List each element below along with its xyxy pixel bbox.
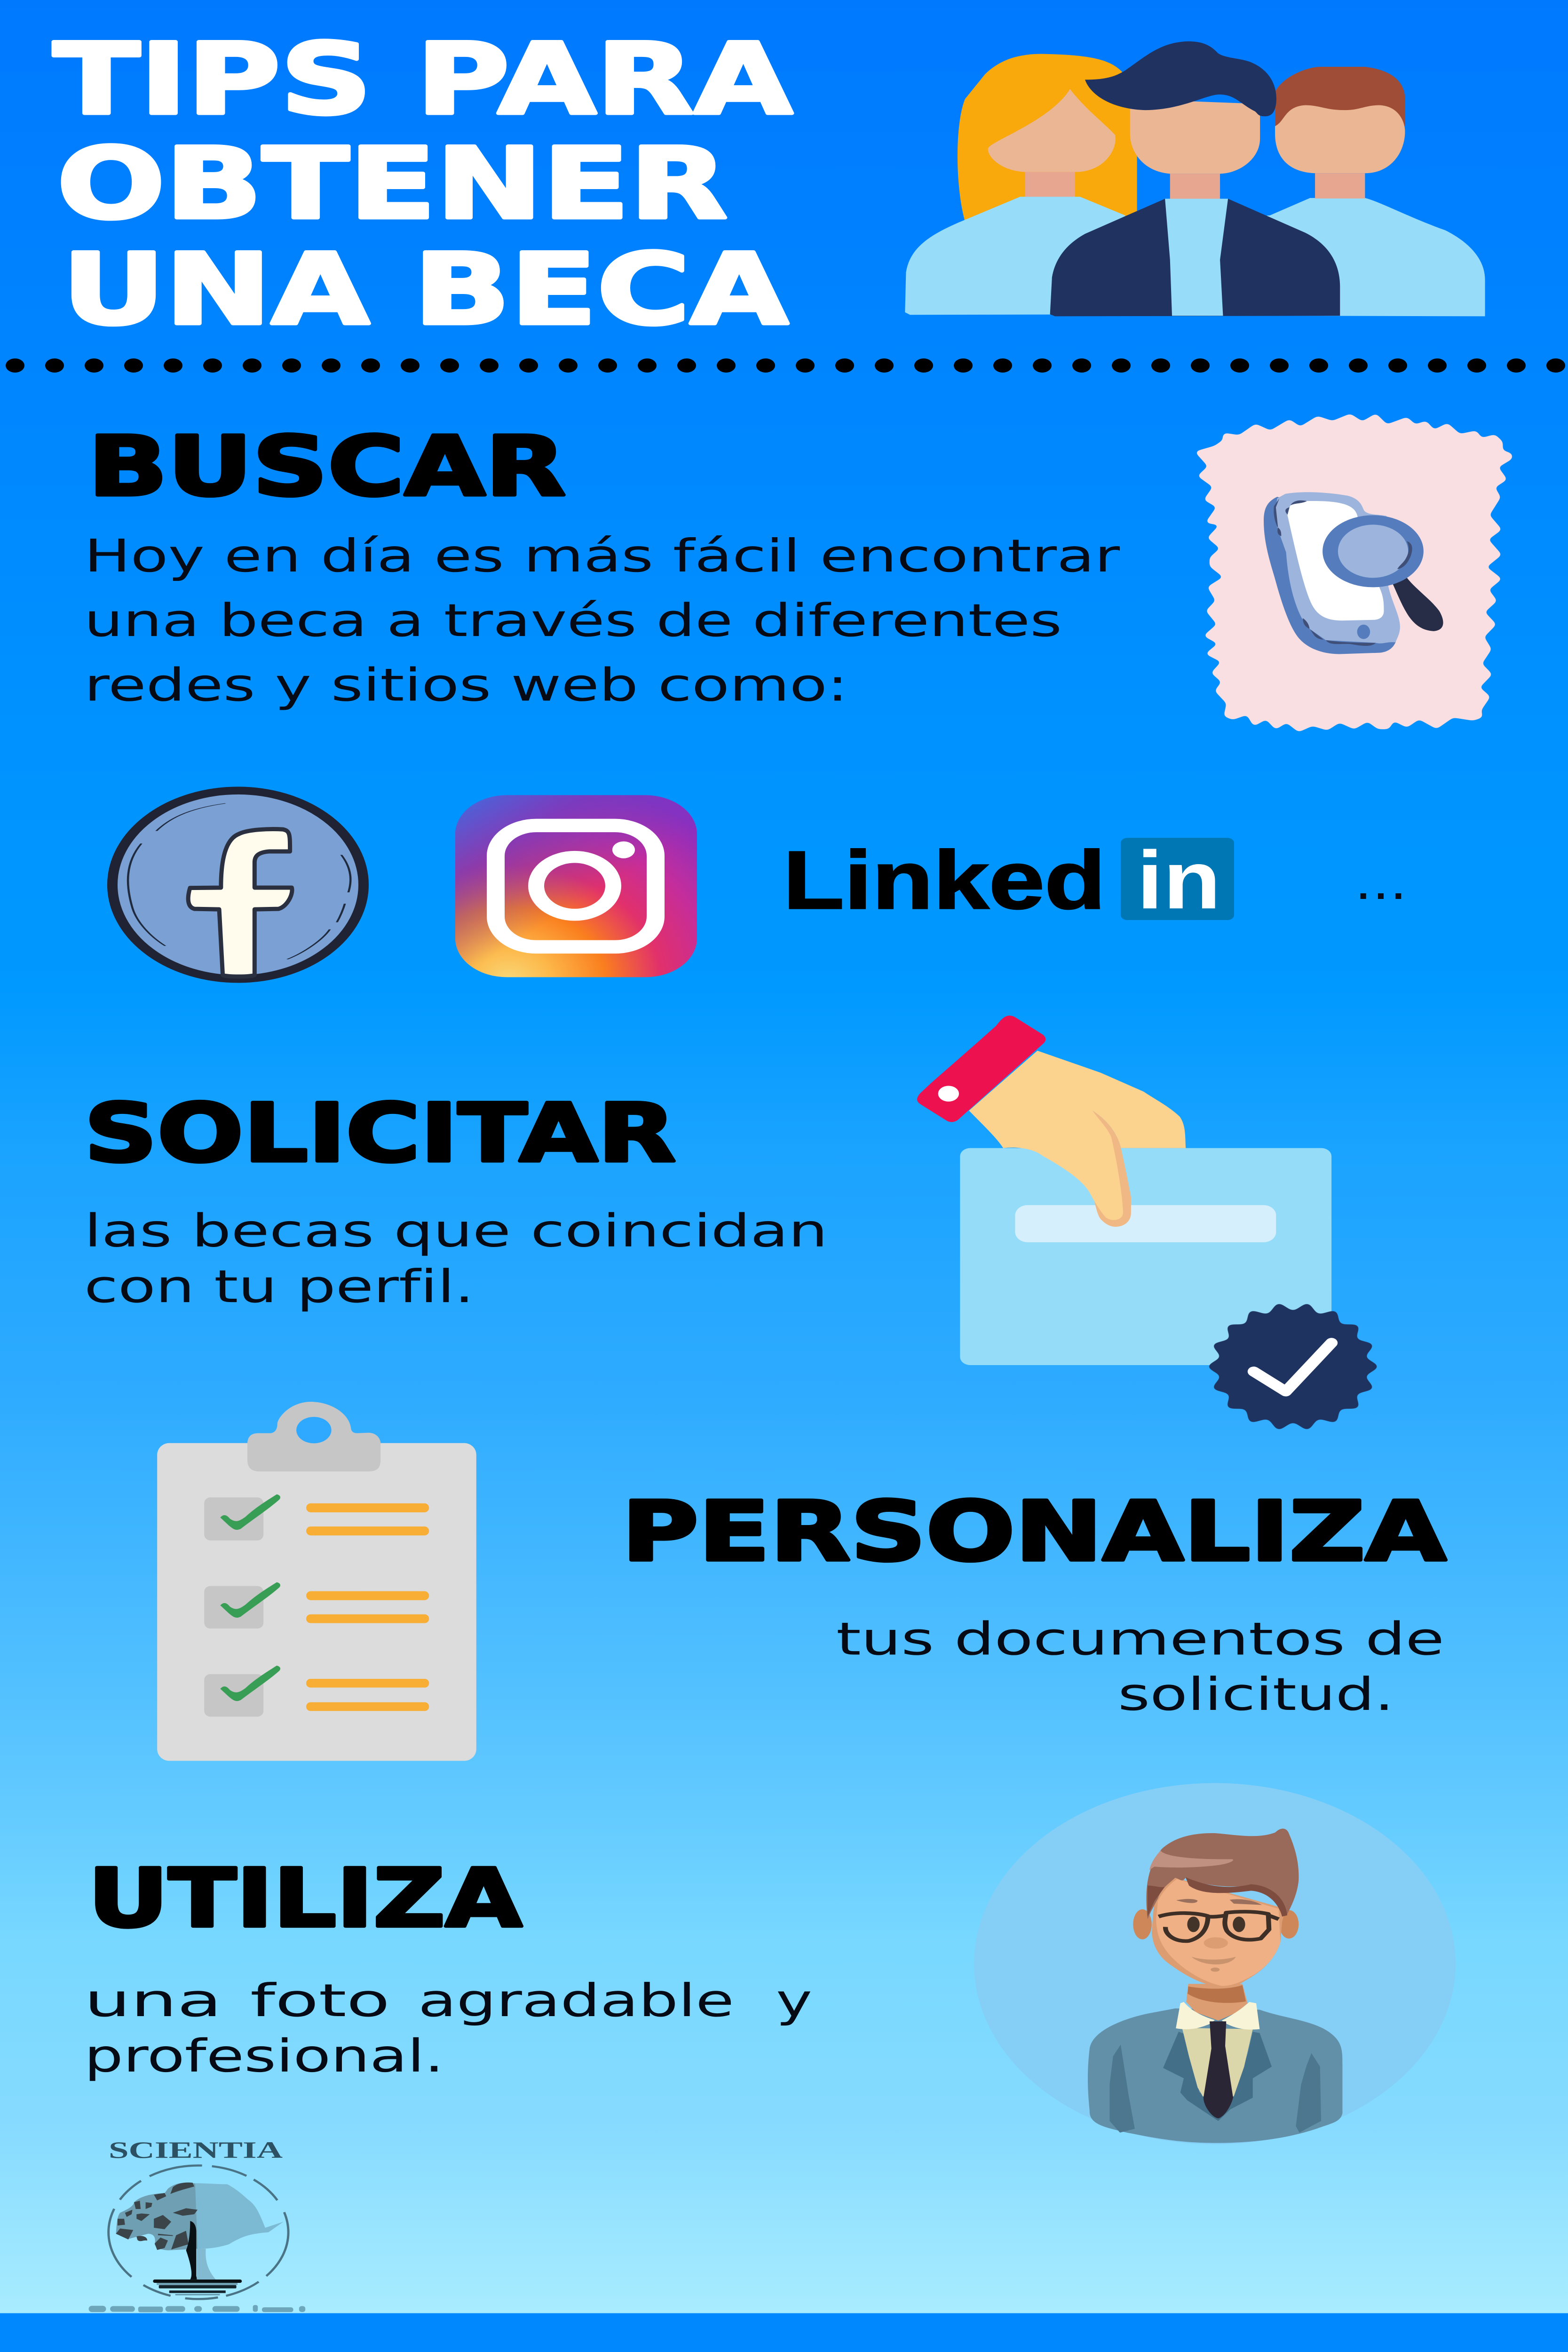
text block: utiliza: agradable	[418, 1974, 734, 2027]
text block: personaliza: tus documentos de	[836, 1613, 1444, 1665]
text block: utiliza	[84, 1974, 812, 2082]
title: TIPS PARA	[53, 22, 792, 136]
text block: buscar: una beca a través de diferentes	[84, 594, 1062, 647]
heading: PERSONALIZA: PERSONALIZA	[622, 1484, 1446, 1580]
text block: utiliza: una	[84, 1974, 222, 2027]
icon: verified badge	[1208, 1303, 1378, 1430]
icon: linkedin: Linked	[783, 834, 1106, 926]
text block: utiliza: foto	[250, 1974, 390, 2027]
ellipsis: ...	[1354, 857, 1407, 910]
logo: scientia tree: SCIENTIA	[109, 2137, 283, 2163]
text block: utiliza: profesional.	[84, 2030, 444, 2082]
icon: three people	[905, 41, 1485, 316]
text block: solicitar	[84, 1205, 828, 1313]
heading: UTILIZA: UTILIZA	[88, 1851, 522, 1946]
footer band	[0, 2313, 1568, 2352]
title: OBTENER	[57, 127, 728, 241]
icon: instagram	[455, 795, 697, 977]
logo: scientia tree	[89, 2137, 305, 2312]
title: UNA BECA	[62, 232, 788, 347]
text block: buscar: Hoy en día es más fácil encontrar	[84, 530, 1120, 582]
title	[53, 22, 792, 347]
text block: utiliza: y	[776, 1974, 812, 2027]
text block: personaliza	[836, 1613, 1444, 1721]
heading: SOLICITAR: SOLICITAR	[84, 1086, 676, 1180]
icon: hand and ballot box	[917, 1016, 1378, 1430]
text block: solicitar: las becas que coincidan	[84, 1205, 828, 1257]
icon: clipboard checklist	[157, 1402, 476, 1761]
icon: phone with magnifier on pink stamp	[1197, 415, 1511, 731]
text block: buscar	[84, 530, 1120, 711]
icon: facebook	[112, 791, 364, 979]
heading: BUSCAR: BUSCAR	[88, 419, 566, 515]
icon: professional portrait	[974, 1783, 1456, 2144]
icon: linkedin: in	[1137, 834, 1221, 926]
text block: personaliza: solicitud.	[1118, 1668, 1394, 1721]
text block: buscar: redes y sitios web como:	[84, 659, 848, 711]
text block: solicitar: con tu perfil.	[84, 1260, 474, 1313]
